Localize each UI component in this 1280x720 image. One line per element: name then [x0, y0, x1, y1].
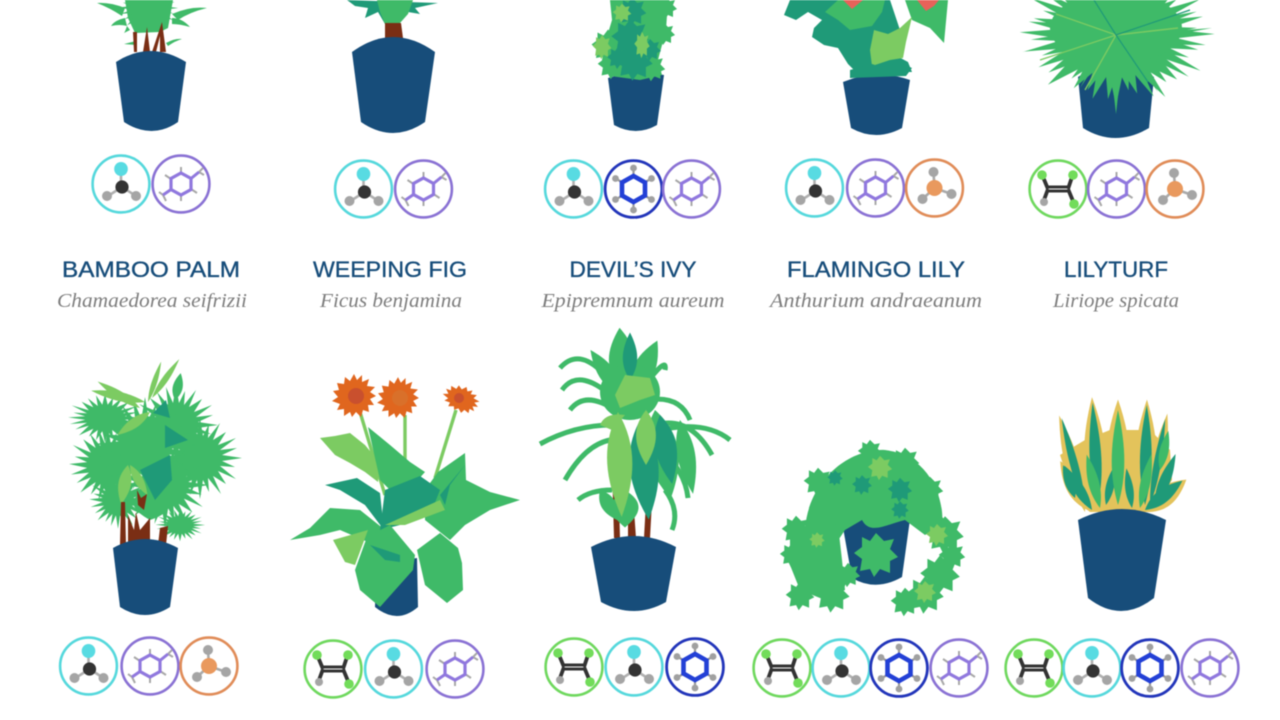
foliage: devil's ivy: [592, 0, 677, 81]
pot: [113, 539, 178, 615]
card: flamingo lily: [768, 0, 982, 312]
foliage: flamingo lily: [784, 0, 948, 78]
pollutant molecules: [754, 640, 987, 696]
molecule: xylene: [395, 161, 452, 217]
pollutant molecules: [60, 638, 237, 694]
molecule: formaldehyde: [786, 160, 843, 216]
molecule: trichloroethylene: [1030, 161, 1086, 217]
molecule: benzene: [667, 639, 723, 695]
foliage: snake plant: [1052, 397, 1192, 520]
latin name: Ficus benjamina: [319, 290, 462, 312]
latin name: Liriope spicata: [1052, 290, 1179, 312]
molecule: xylene: [153, 156, 209, 212]
pot: [843, 74, 910, 135]
card: dracaena: [540, 327, 730, 695]
pot: [1078, 509, 1166, 611]
molecule: xylene: [427, 641, 483, 697]
card: weeping fig: [313, 0, 467, 312]
pollutant molecules: [1030, 161, 1203, 217]
molecule: benzene: [605, 161, 662, 217]
card: snake plant: [1006, 397, 1238, 696]
molecule: xylene: [847, 160, 904, 216]
latin name: Epipremnum aureum: [540, 290, 724, 312]
molecule: formaldehyde: [335, 161, 392, 217]
foliage: weeping fig: [347, 0, 438, 38]
molecule: formaldehyde: [545, 161, 602, 217]
card: gerbera daisy: [290, 374, 520, 697]
flowers: [332, 374, 484, 418]
molecule: xylene: [1182, 640, 1238, 696]
foliage: bamboo palm: [97, 0, 207, 52]
card: bamboo palm: [57, 0, 247, 312]
latin name: Chamaedorea seifrizii: [57, 290, 247, 312]
pollutant molecules: [93, 156, 209, 212]
molecule: benzene: [871, 640, 927, 696]
card: english ivy: [754, 440, 987, 696]
foliage: lilyturf: [1020, 0, 1215, 114]
molecule: ammonia: [181, 638, 237, 694]
molecule: formaldehyde: [1064, 640, 1120, 696]
molecule: xylene: [1088, 161, 1145, 217]
plant name: BAMBOO PALM: [62, 257, 240, 282]
molecule: xylene: [122, 638, 178, 694]
molecule: trichloroethylene: [754, 640, 810, 696]
pot: [608, 73, 664, 131]
plant name: DEVIL’S IVY: [570, 257, 697, 282]
pollutant molecules: [545, 161, 720, 217]
pot: [1078, 64, 1154, 138]
molecule: xylene: [931, 640, 987, 696]
card: devil's ivy: [540, 0, 724, 312]
pot: [591, 536, 676, 611]
latin name: Anthurium andraeanum: [768, 290, 982, 312]
molecule: formaldehyde: [365, 641, 422, 697]
card: lady palm: [60, 357, 242, 694]
plant name: LILYTURF: [1064, 257, 1168, 282]
pollutant molecules: [335, 161, 452, 217]
pollutant molecules: [1006, 640, 1238, 696]
pot: [116, 51, 186, 131]
molecule: benzene: [1122, 640, 1178, 696]
molecule: formaldehyde: [606, 639, 662, 695]
foliage: gerbera daisy: [290, 410, 520, 607]
plant name: FLAMINGO LILY: [787, 257, 965, 282]
pollutant molecules: [546, 639, 723, 695]
pot: [839, 505, 912, 585]
molecule: formaldehyde: [93, 156, 149, 212]
plant name: WEEPING FIG: [313, 257, 467, 282]
pollutant molecules: [305, 641, 483, 697]
molecule: formaldehyde: [813, 640, 869, 696]
pollutant molecules: [786, 160, 963, 216]
molecule: formaldehyde: [60, 638, 117, 694]
foliage: lady palm: [68, 357, 242, 545]
foliage: english ivy: [780, 440, 965, 616]
pot: [352, 37, 435, 133]
molecule: xylene: [663, 161, 720, 217]
card: lilyturf: [1020, 0, 1215, 312]
molecule: trichloroethylene: [305, 641, 361, 697]
foliage: dracaena: [540, 327, 730, 538]
pot: [375, 558, 418, 616]
molecule: ammonia: [1147, 161, 1203, 217]
molecule: trichloroethylene: [546, 639, 602, 695]
molecule: ammonia: [906, 160, 963, 216]
molecule: trichloroethylene: [1006, 640, 1062, 696]
